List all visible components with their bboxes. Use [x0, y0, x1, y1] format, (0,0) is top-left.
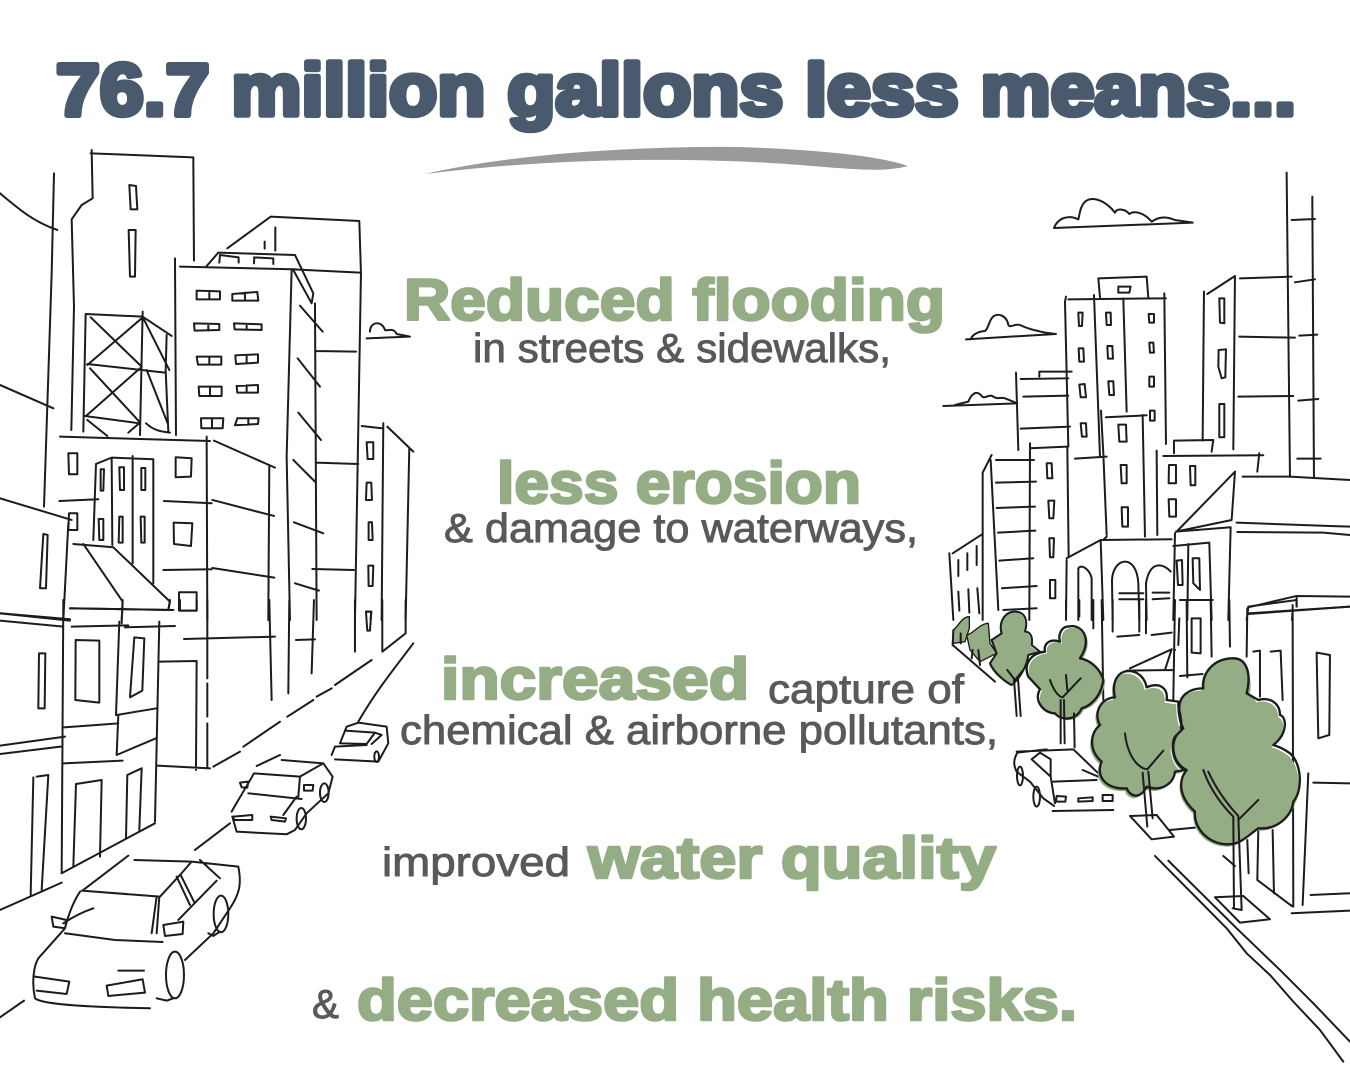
title: 76.7 million gallons less means... — [56, 50, 1296, 131]
text block: water quality — [382, 826, 996, 891]
illustration: right street lines and car — [953, 600, 1350, 1062]
text block: health risks: & — [312, 981, 339, 1027]
text block: less erosion: & damage to waterways, — [444, 505, 918, 551]
car: middle — [195, 755, 333, 850]
car behind trees — [1014, 749, 1113, 811]
tree: second — [1090, 671, 1185, 827]
illustration: left city buildings, upper — [0, 150, 413, 620]
tree: big foreground — [1172, 657, 1300, 910]
tree: small pair — [953, 617, 997, 665]
illustration: right city buildings and clouds — [943, 173, 1350, 620]
text block: increased capture: increased — [441, 647, 749, 712]
text block: increased capture — [400, 647, 998, 753]
brush stroke underline — [425, 147, 908, 174]
tree: third — [1027, 626, 1105, 747]
cloud: small — [943, 393, 1017, 406]
text block: less erosion: less erosion — [497, 451, 861, 516]
cloud: large — [1054, 199, 1193, 228]
text block: less erosion — [444, 451, 918, 551]
text block: reduced flooding — [404, 268, 945, 371]
text block: water quality: water quality — [587, 826, 996, 891]
text block: increased capture: chemical & airborne pollutants, — [400, 707, 998, 753]
text block: reduced flooding: Reduced flooding — [404, 268, 945, 333]
car: far — [332, 723, 388, 762]
car: front — [0, 856, 240, 1017]
text block: water quality: improved — [382, 839, 570, 885]
text block: health risks: decreased health risks. — [357, 968, 1077, 1033]
sidewalk kerb — [1155, 856, 1350, 1062]
cloud: middle — [966, 315, 1056, 339]
trees — [953, 612, 1300, 910]
text block: increased capture: capture of — [768, 666, 965, 712]
text block: reduced flooding: in streets & sidewalks, — [473, 325, 891, 371]
tree: fourth — [989, 612, 1040, 716]
illustration: left city street and cars — [0, 600, 413, 1017]
